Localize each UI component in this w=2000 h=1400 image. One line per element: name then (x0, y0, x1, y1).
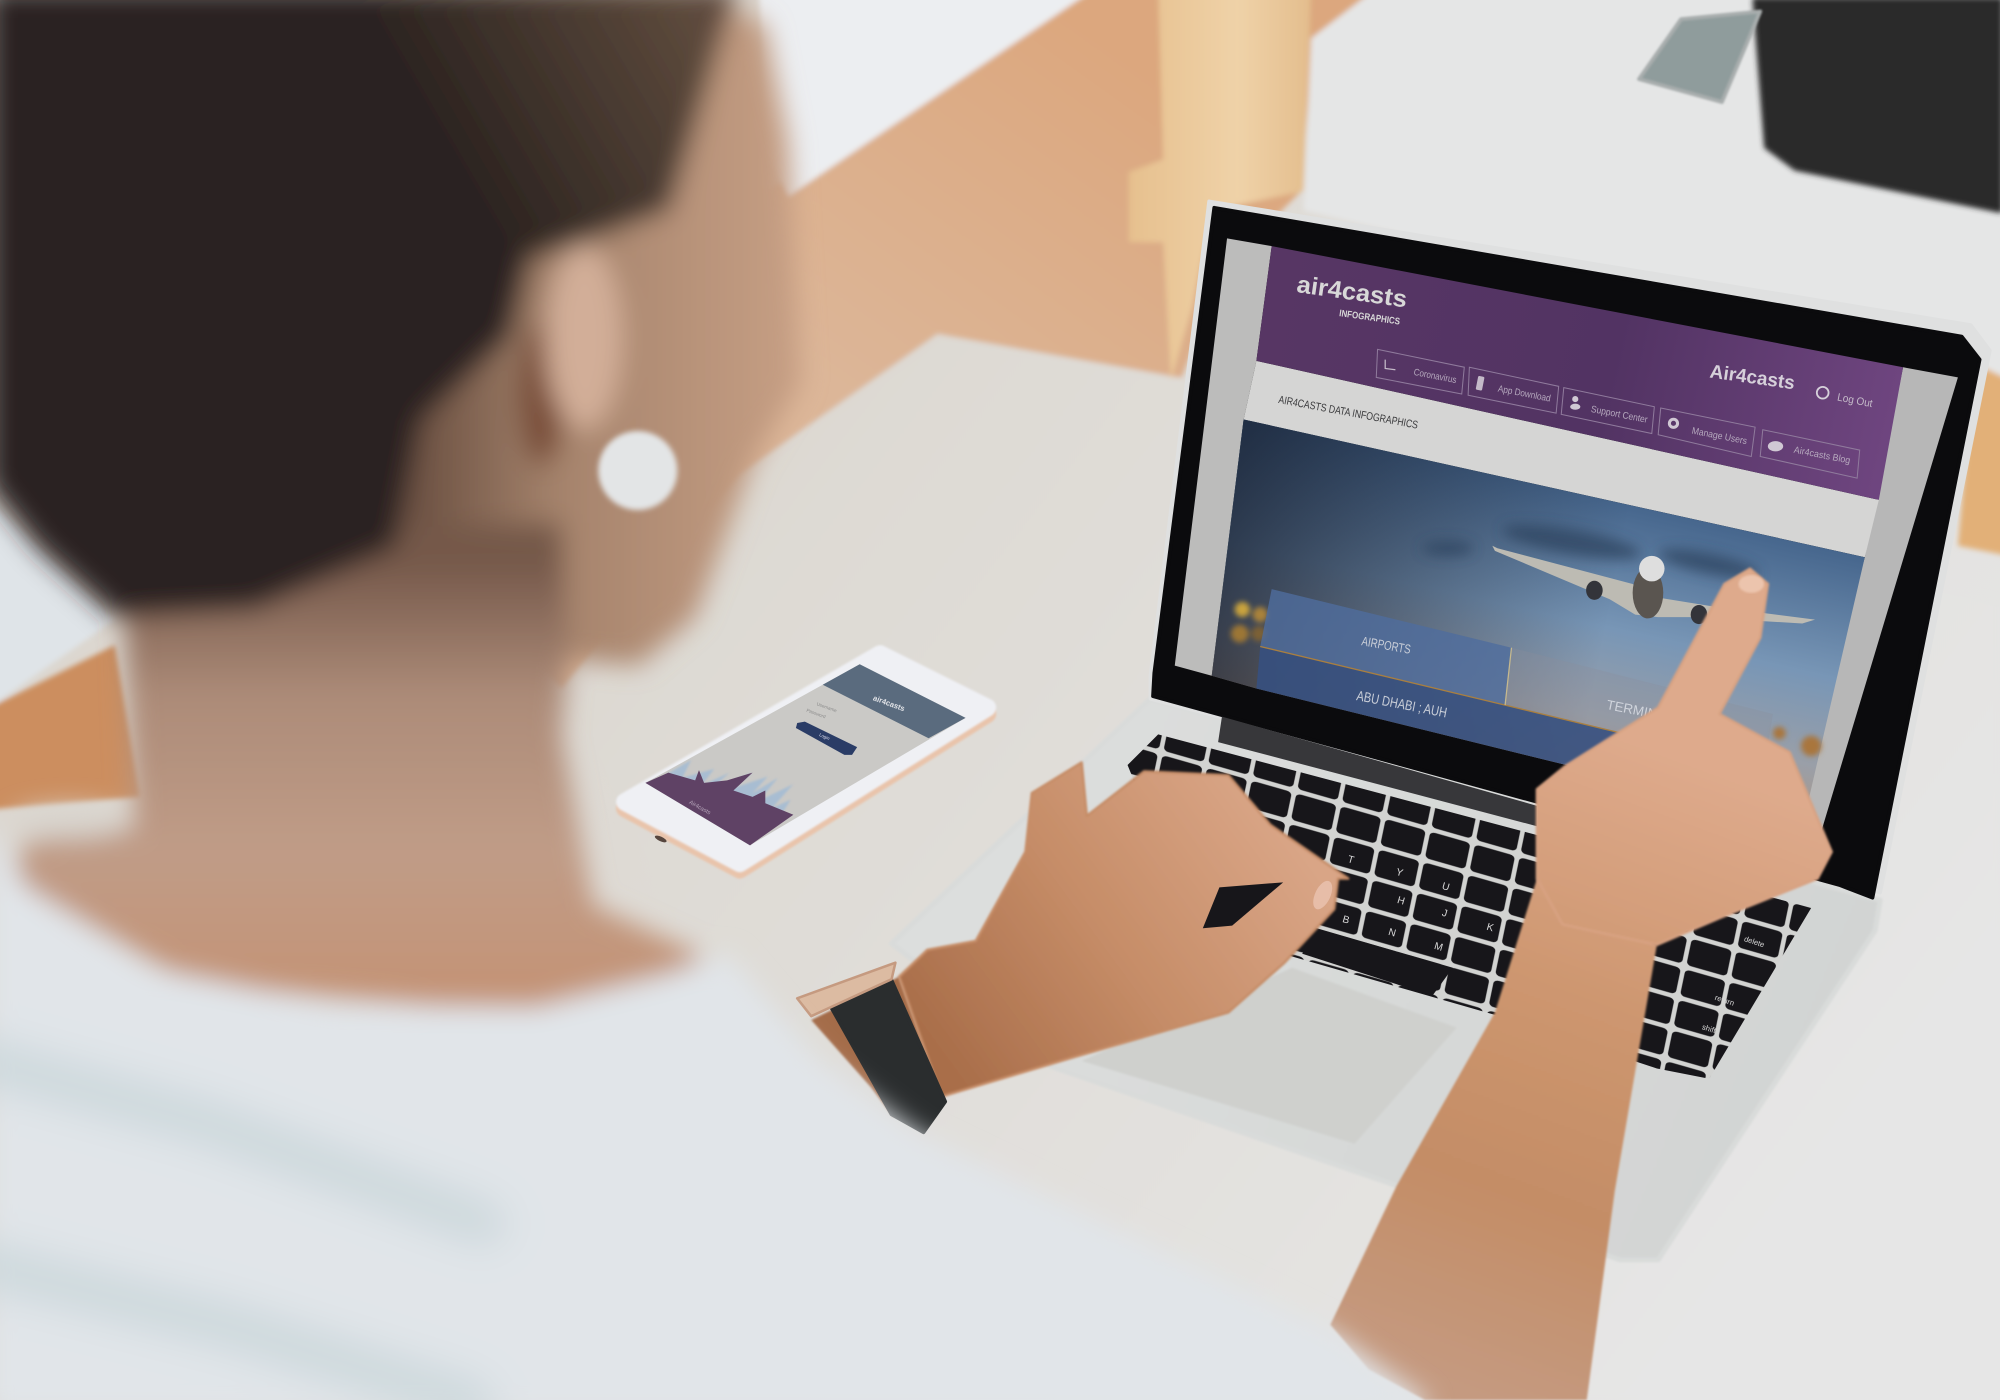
trackpad (1082, 968, 1457, 1144)
hero photo shading (1212, 419, 1865, 816)
wood strip right (1958, 363, 2000, 557)
page title: AIR4CASTS DATA INFOGRAPHICS (1278, 394, 1419, 432)
palm and fingers (899, 762, 1348, 1097)
username and password labels: Username (816, 701, 838, 713)
purple header (1256, 246, 1903, 500)
white cushion top left (759, 0, 1097, 196)
runway lights left (1231, 602, 1821, 756)
person (foreground, blurred) (0, 0, 1426, 1400)
login button (796, 722, 857, 755)
title band (1244, 361, 1879, 557)
key labels: B (1341, 914, 1351, 927)
keyboard (1128, 734, 1811, 1079)
wooden chair leg (1129, 0, 1311, 380)
key labels: N (1387, 927, 1397, 940)
key labels: Y (1395, 867, 1404, 879)
nav: App Download (1468, 367, 1559, 413)
laptop (892, 201, 1990, 1260)
logo (1293, 271, 1409, 328)
label: terminals: TERMINALS (1605, 697, 1683, 726)
ear (546, 246, 622, 430)
app logo: air4casts (872, 693, 906, 713)
label: airports: AIRPORTS (1360, 633, 1412, 657)
watch strap (829, 981, 945, 1132)
logo: INFOGRAPHICS (1338, 308, 1401, 328)
app header (823, 664, 966, 738)
key labels: M (1433, 941, 1444, 954)
log out control: Log Out (1836, 392, 1874, 410)
vertical divider (1505, 648, 1511, 705)
wooden floor (510, 0, 1390, 689)
shirt stripes (0, 1058, 485, 1400)
login button label: Login (818, 732, 831, 741)
panel: selected airport (1256, 646, 1658, 765)
key labels: U (1440, 881, 1451, 894)
airplane (1492, 546, 1815, 624)
lid bezel (1153, 208, 1980, 898)
forearm (811, 977, 941, 1117)
screen: web dashboard (1175, 238, 1958, 848)
key labels: H (1396, 895, 1406, 908)
left white surface (0, 497, 115, 709)
gold divider (1260, 646, 1658, 742)
hair (0, 0, 737, 617)
key labels: return (1714, 993, 1735, 1008)
phone body (625, 654, 987, 863)
label: airport code: ABU DHABI ; AUH (1355, 687, 1448, 720)
panel: terminals (1505, 648, 1773, 752)
footer text: Air4casts (688, 800, 711, 816)
user name: Air4casts (1708, 362, 1796, 394)
hand (1537, 569, 1832, 945)
nav: Manage Users (1658, 408, 1755, 456)
dark device top right (1755, 0, 2000, 210)
app footer (645, 770, 793, 845)
log out control (1817, 387, 1874, 410)
skyline (667, 760, 793, 816)
pointing hand and arm (1330, 569, 1832, 1400)
fingernail (1739, 575, 1764, 593)
ear shadow (519, 325, 565, 465)
key labels: shift (1701, 1022, 1718, 1035)
phone screen (645, 664, 966, 845)
hero photo: sky (1212, 419, 1865, 816)
nav: Support Center: Support Center (1590, 404, 1649, 426)
logo: air4casts (1295, 271, 1409, 313)
hinge (1218, 717, 1537, 826)
username and password labels: Password (806, 708, 827, 719)
left wood floor (0, 645, 140, 810)
watch case (797, 963, 895, 1016)
shoulders and neck (13, 523, 704, 1007)
phone on back table (1639, 11, 1760, 102)
screen background right (1798, 367, 1958, 848)
key labels: K (1485, 922, 1495, 934)
clouds (1422, 517, 1761, 584)
finger gap (1203, 882, 1283, 928)
nav: Support Center (1561, 388, 1654, 434)
key labels: delete (1743, 934, 1766, 949)
key labels (1341, 854, 1766, 1035)
nav: Coronavirus (1376, 349, 1464, 394)
nav: Manage Users: Manage Users (1691, 426, 1748, 447)
key labels: J (1440, 908, 1448, 920)
thumbnail (1309, 878, 1336, 912)
earring (598, 431, 677, 510)
key labels: T (1346, 854, 1355, 867)
shirt (0, 822, 1426, 1400)
left side collar highlight (13, 807, 128, 838)
nav: App Download: App Download (1497, 384, 1552, 405)
lid rim (1151, 201, 1990, 893)
username and password labels (806, 701, 838, 719)
back table top (1304, 0, 2000, 383)
hand on keyboard (797, 762, 1348, 1132)
home port (654, 834, 667, 844)
panel: airports (1260, 589, 1511, 705)
face and back of head (383, 0, 801, 666)
nav: Coronavirus: Coronavirus (1413, 367, 1458, 386)
nav: Air4casts Blog: Air4casts Blog (1793, 445, 1851, 467)
arm (1330, 879, 1657, 1400)
spacebar (1302, 927, 1453, 996)
laptop base (892, 699, 1880, 1260)
smartphone (625, 654, 987, 870)
phone edge (625, 660, 987, 870)
nav: Air4casts Blog (1760, 430, 1860, 478)
front table top (561, 334, 2000, 1400)
screen background left (1175, 238, 1272, 676)
